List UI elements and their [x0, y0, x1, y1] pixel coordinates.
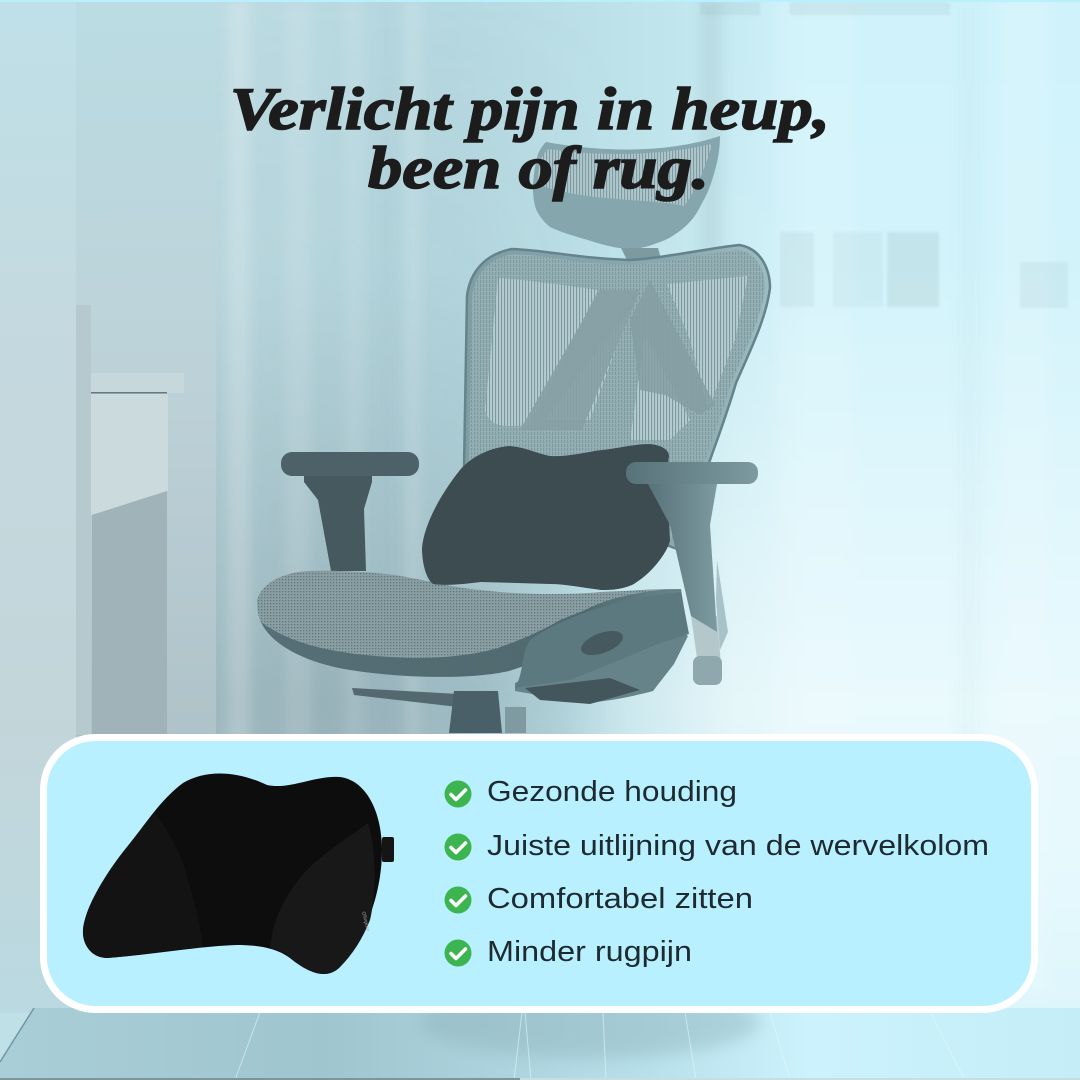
cushion highlights [83, 812, 203, 958]
cushion logo: Ollinpure [360, 911, 371, 932]
chair lower mechanism and column [352, 612, 688, 733]
lumbar cushion on chair [422, 444, 670, 590]
office chair [257, 136, 770, 733]
info panel [44, 738, 1034, 1010]
back inner supports [520, 290, 640, 430]
benefit list [444, 776, 989, 968]
title: Verlicht pijn in heup, [230, 76, 830, 142]
chair seat [257, 571, 689, 688]
desk and door frame on the left [76, 305, 184, 735]
chair backrest mesh [464, 245, 770, 550]
product photo: lumbar cushion [83, 773, 394, 974]
benefit: Gezonde houding: Gezonde houding [487, 776, 737, 808]
chair left armrest [281, 452, 419, 571]
title [230, 76, 830, 201]
benefit: Comfortabel zitten: Comfortabel zitten [487, 883, 753, 915]
title: been of rug. [368, 135, 709, 201]
benefit: Juiste uitlijning van de wervelkolom: Juiste uitlijning van de wervelkolom [487, 830, 989, 862]
chair headrest [533, 136, 720, 262]
benefit: Minder rugpijn: Minder rugpijn [487, 936, 692, 968]
chair right armrest [626, 462, 758, 685]
floor [0, 986, 1080, 1080]
back mesh light panels [485, 278, 598, 426]
